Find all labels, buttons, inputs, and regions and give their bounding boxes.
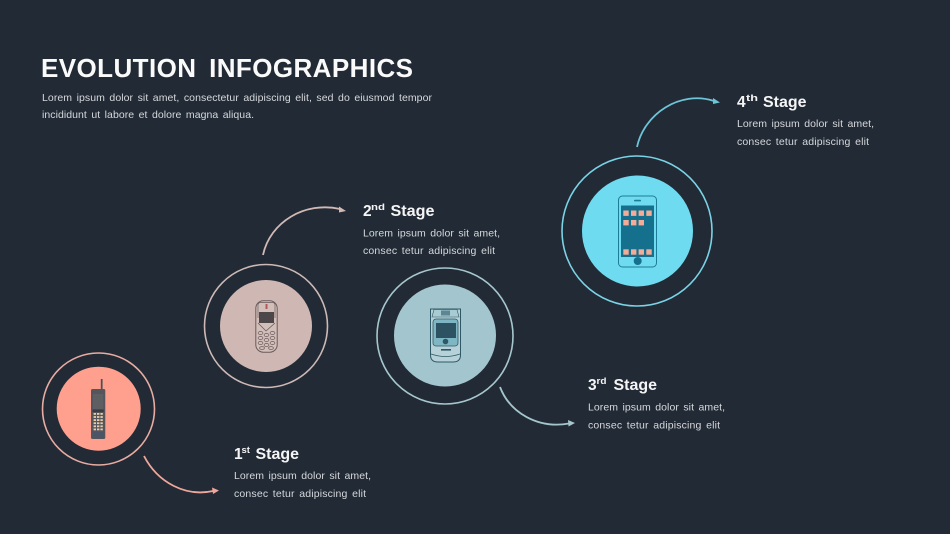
text: stage 3: consec tetur adipiscing elit (588, 420, 720, 432)
icon: brick phone (91, 379, 105, 439)
icon: smartphone (618, 196, 656, 267)
text: stage 3: Lorem ipsum dolor sit amet, (588, 402, 725, 414)
intro text: Lorem ipsum dolor sit amet, consectetur adipiscing elit, sed do eiusmod tempor (42, 92, 432, 104)
text: stage 1: 1 (234, 446, 243, 463)
text: stage 1: Lorem ipsum dolor sit amet, (234, 470, 371, 482)
text: stage 4: Lorem ipsum dolor sit amet, (737, 118, 874, 130)
arrow: stage 4 (637, 98, 720, 147)
text: stage 4: consec tetur adipiscing elit (737, 136, 869, 148)
arrow: stage 2 (263, 206, 346, 255)
intro text (42, 92, 432, 121)
text: stage 2: Lorem ipsum dolor sit amet, (363, 228, 500, 240)
text: stage 4: th (746, 93, 758, 104)
text: stage 1: Stage (256, 446, 299, 463)
arrow: stage 1 (144, 456, 219, 494)
intro text: incididunt ut labore et dolore magna aliqua. (42, 109, 254, 121)
text: stage 1 (234, 445, 371, 500)
text: stage 2: 2 (363, 203, 372, 220)
text: stage 3: 3 (588, 377, 597, 394)
panel: stage 1 circle (42, 353, 154, 465)
text: stage 1: consec tetur adipiscing elit (234, 488, 366, 500)
text: stage 4: Stage (763, 94, 807, 111)
text: stage 4: 4 (737, 94, 746, 111)
text: stage 3: Stage (614, 377, 657, 394)
panel: stage 2 circle (204, 264, 328, 388)
text: stage 3 (588, 376, 725, 432)
arrow: stage 3 (500, 387, 575, 426)
text: stage 4 (737, 93, 874, 148)
text: stage 2: consec tetur adipiscing elit (363, 245, 495, 257)
icon: flip phone (430, 309, 460, 362)
text: stage 2: Stage (390, 203, 435, 220)
text: stage 2: nd (371, 202, 385, 213)
text: stage 2 (363, 202, 500, 257)
panel: stage 3 circle (377, 268, 513, 404)
text: stage 3: rd (596, 376, 607, 387)
text: stage 1: st (242, 445, 251, 456)
icon: candybar phone (256, 301, 277, 352)
title: EVOLUTION INFOGRAPHICS (41, 53, 413, 83)
panel: stage 4 circle (562, 156, 712, 306)
